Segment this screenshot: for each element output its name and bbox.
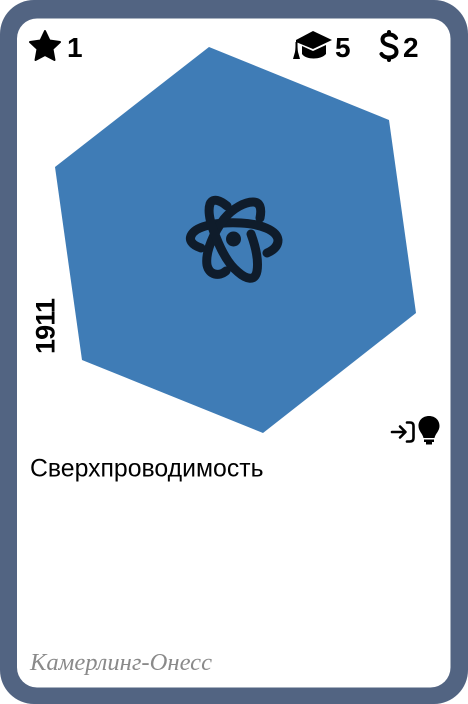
card title: Сверхпроводимость — [30, 456, 264, 482]
education value: 5 — [335, 32, 351, 63]
icon: light bulb — [418, 416, 440, 444]
icon: arrow into bracket — [392, 422, 414, 442]
icon: star — [30, 31, 60, 60]
year: 1911 — [30, 298, 60, 354]
star value: 1 — [67, 32, 83, 63]
icon: dollar sign — [382, 32, 396, 60]
icon: atom — [190, 200, 278, 278]
author: Камерлинг-Онесс — [29, 649, 212, 676]
cost value: 2 — [403, 32, 419, 63]
hexagon — [55, 47, 416, 433]
icon: graduation cap — [293, 31, 332, 59]
